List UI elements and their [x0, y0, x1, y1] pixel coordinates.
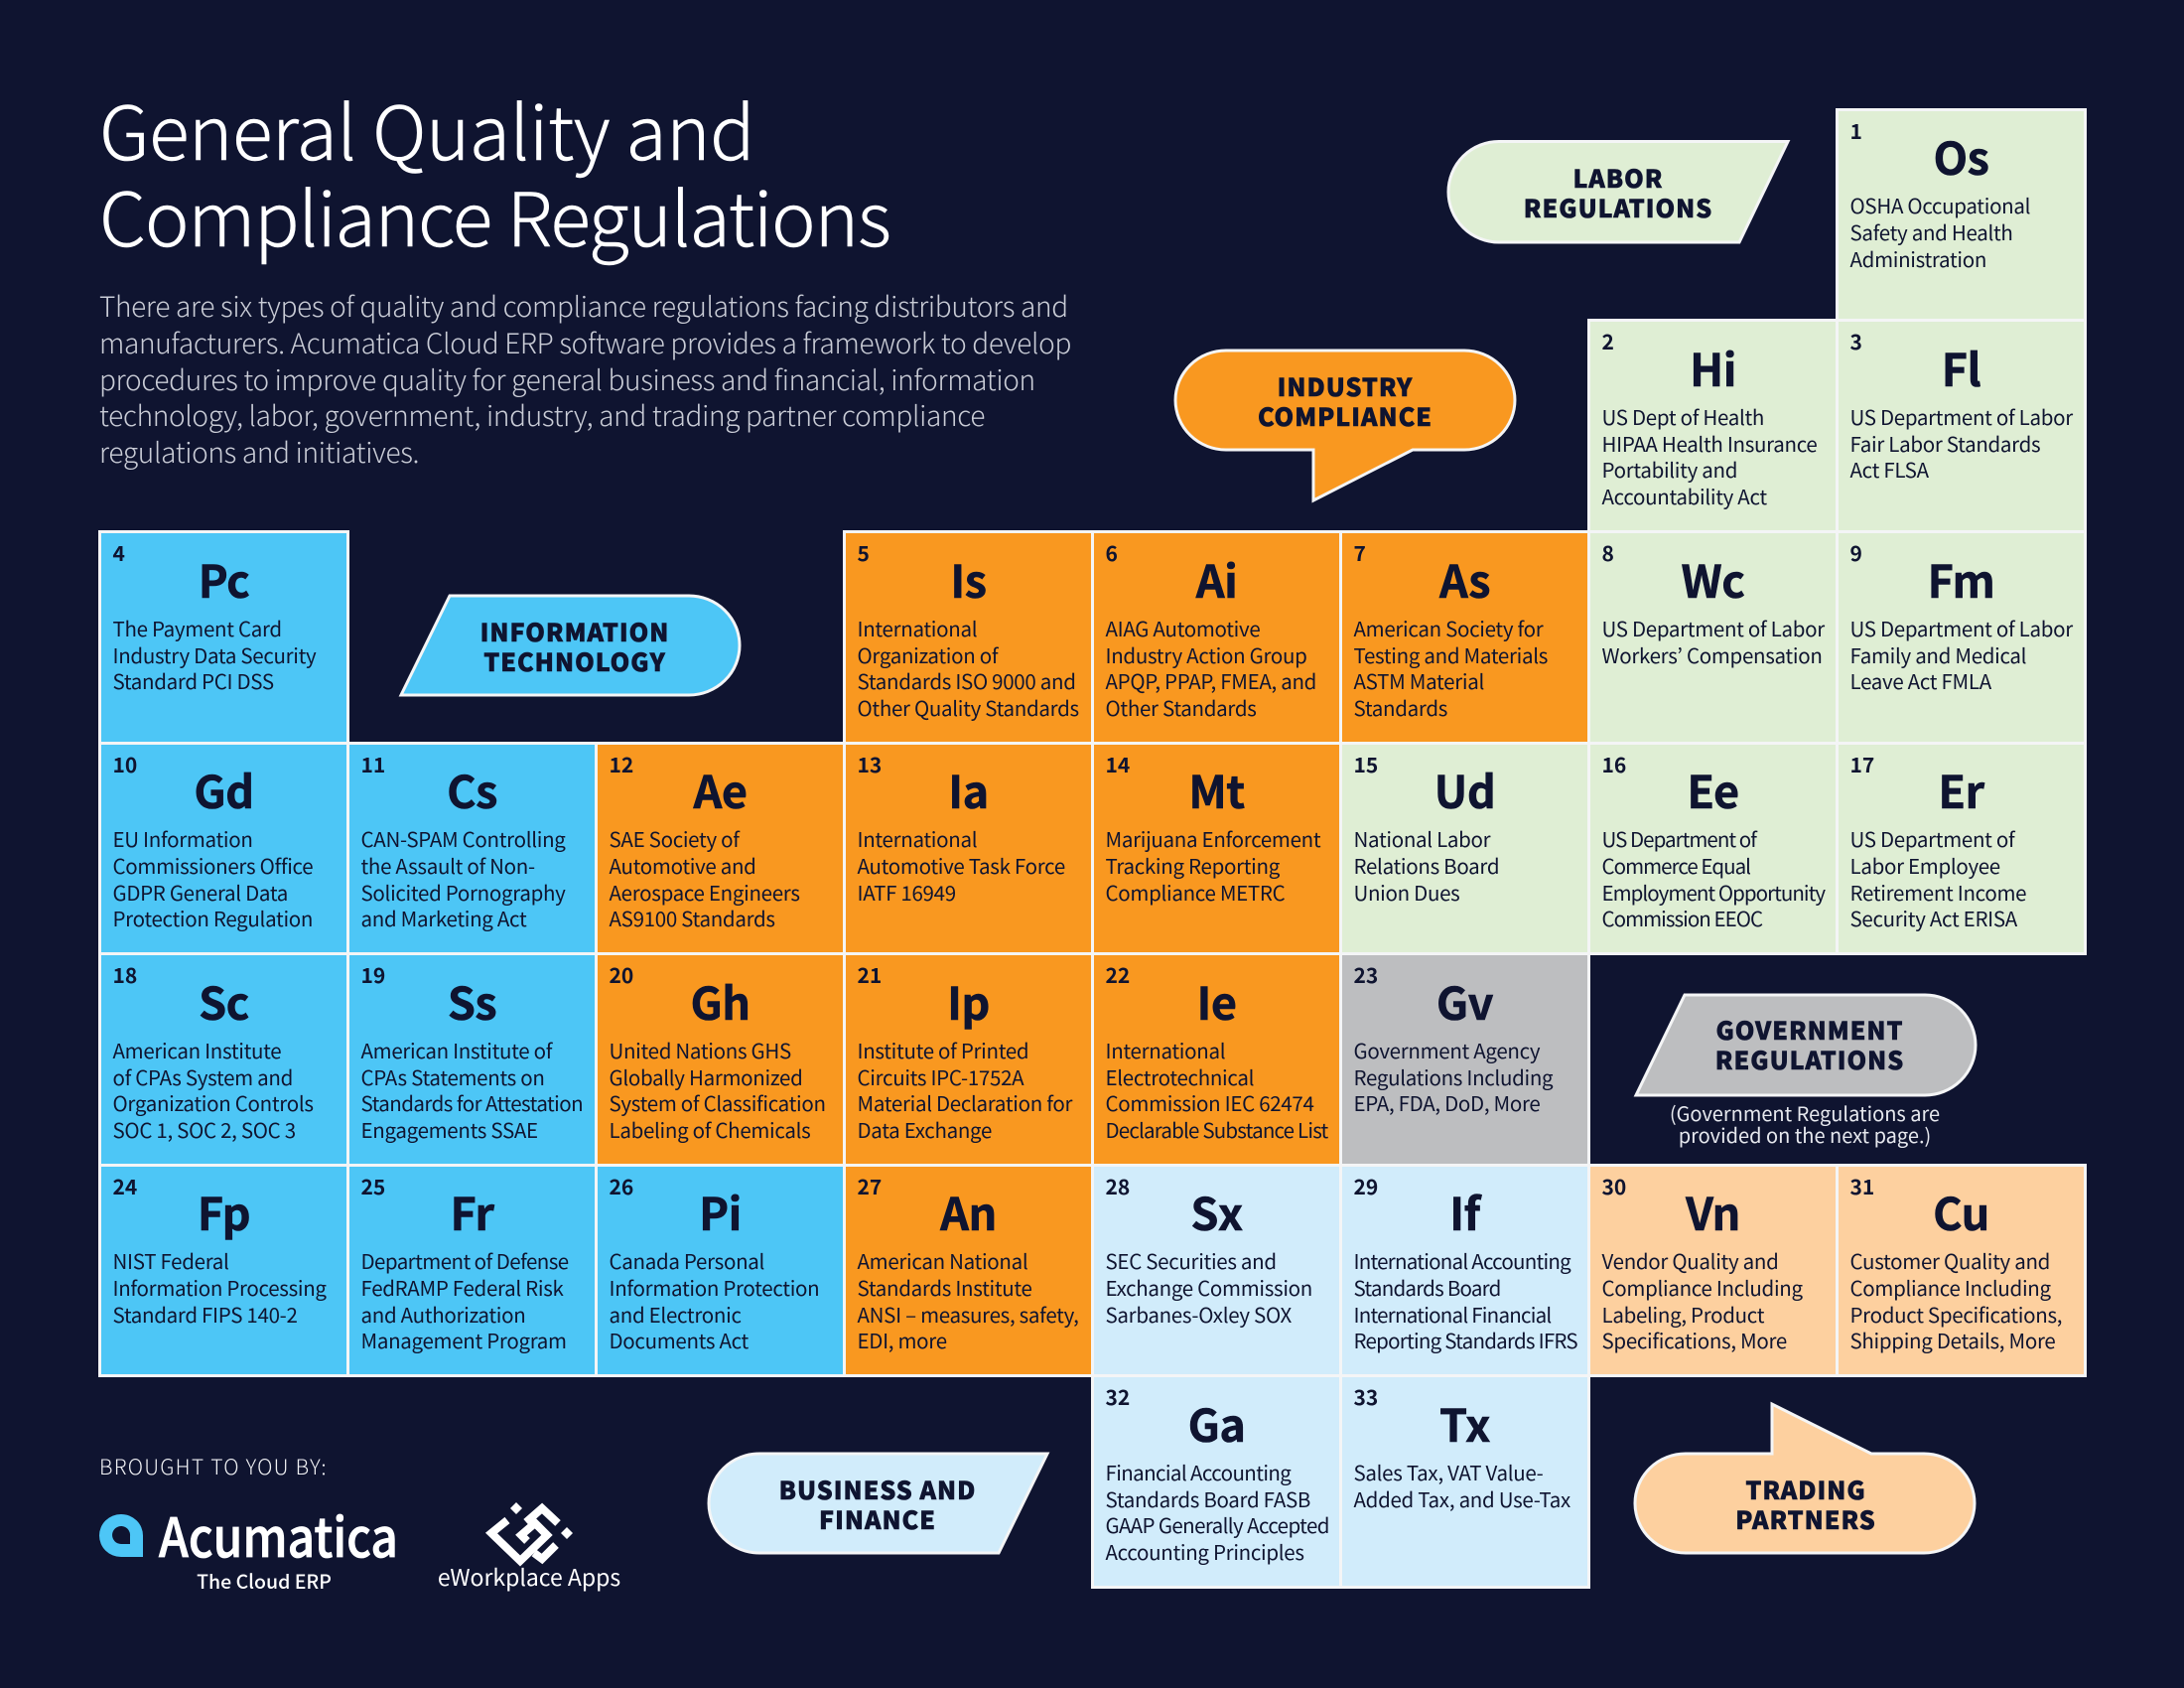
description: Accounting Principles — [1106, 1536, 1304, 1566]
intro text block: regulations and initiatives. — [99, 432, 419, 472]
number: 18 — [113, 960, 137, 990]
description: Standard PCI DSS — [113, 665, 274, 695]
number: 9 — [1850, 538, 1862, 568]
description: and Electronic — [610, 1299, 742, 1329]
number: 26 — [610, 1172, 633, 1201]
cell 24: Fp — [98, 1164, 349, 1377]
number: 11 — [361, 750, 385, 779]
description — [1602, 613, 1825, 669]
number: 8 — [1602, 538, 1614, 568]
description: Sarbanes-Oxley SOX — [1106, 1299, 1292, 1329]
description: US Department of Labor — [1602, 613, 1825, 642]
description — [361, 823, 566, 932]
symbol: Cs — [447, 757, 497, 821]
description: Commerce Equal — [1602, 850, 1750, 880]
icon: eWorkplace mark — [491, 1508, 558, 1561]
description: SEC Securities and — [1106, 1245, 1277, 1275]
description: Fair Labor Standards — [1850, 427, 2040, 457]
description — [1602, 823, 1826, 932]
description: EU Information — [113, 823, 253, 853]
label: industry compliance: COMPLIANCE — [1258, 398, 1433, 434]
cell 30: Vn — [1587, 1164, 1839, 1377]
description: Customer Quality and — [1850, 1245, 2050, 1275]
symbol: Ud — [1434, 757, 1495, 821]
description: OSHA Occupational — [1850, 190, 2030, 219]
number: 30 — [1602, 1172, 1626, 1201]
description: GDPR General Data — [113, 877, 288, 907]
description: Standards — [1354, 692, 1447, 722]
symbol: Gh — [690, 968, 751, 1033]
cell 4: Pc — [98, 530, 349, 745]
number: 16 — [1602, 750, 1626, 779]
description: Portability and — [1602, 454, 1737, 484]
cell 19: Ss — [346, 952, 598, 1167]
description: FedRAMP Federal Risk — [361, 1272, 564, 1302]
description: US Dept of Health — [1602, 401, 1764, 431]
number: 12 — [610, 750, 633, 779]
description: Globally Harmonized — [610, 1060, 803, 1090]
description: Compliance METRC — [1106, 877, 1285, 907]
description — [1354, 1035, 1553, 1117]
symbol: Ip — [947, 968, 990, 1033]
cell 15: Ud — [1339, 741, 1590, 955]
description: of CPAs System and — [113, 1060, 293, 1090]
description: National Labor — [1354, 823, 1490, 853]
label: government regulations: REGULATIONS — [1715, 1042, 1904, 1077]
description: Standards Board FASB — [1106, 1483, 1310, 1513]
description: Labeling of Chemicals — [610, 1114, 810, 1144]
symbol: Ga — [1188, 1390, 1245, 1455]
description: Shipping Details, More — [1850, 1325, 2055, 1354]
cell 18: Sc — [98, 952, 349, 1167]
cell 11: Cs — [346, 741, 598, 955]
symbol: As — [1439, 546, 1490, 611]
description: International — [858, 823, 977, 853]
number: 27 — [858, 1172, 882, 1201]
description: Standards ISO 9000 and — [858, 665, 1076, 695]
description: IATF 16949 — [858, 877, 956, 907]
description — [1602, 401, 1817, 510]
cell 31: Cu — [1836, 1164, 2087, 1377]
description: Leave Act FMLA — [1850, 665, 1991, 695]
logo: eWorkplace Apps — [438, 1502, 620, 1593]
description: International Financial — [1354, 1299, 1551, 1329]
description — [1850, 823, 2026, 932]
number: 33 — [1354, 1382, 1378, 1412]
cell 27: An — [843, 1164, 1094, 1377]
intro text block: procedures to improve quality for general business and financial, information — [99, 359, 1035, 399]
description: Labeling, Product — [1602, 1299, 1764, 1329]
description: Material Declaration for — [858, 1087, 1072, 1117]
description — [1850, 1245, 2062, 1354]
cell 28: Sx — [1091, 1164, 1342, 1377]
description — [1106, 1035, 1328, 1144]
number: 24 — [113, 1172, 137, 1201]
number: 25 — [361, 1172, 385, 1201]
description — [361, 1245, 569, 1354]
symbol: Mt — [1188, 757, 1245, 821]
cell 26: Pi — [595, 1164, 846, 1377]
label: business and finance — [709, 1454, 1047, 1553]
number: 2 — [1602, 327, 1614, 356]
description: Automotive Task Force — [858, 850, 1065, 880]
cell 17: Er — [1836, 741, 2087, 955]
description: Added Tax, and Use-Tax — [1354, 1483, 1570, 1513]
number: 14 — [1106, 750, 1130, 779]
cell 13: Ia — [843, 741, 1094, 955]
description — [1602, 1245, 1803, 1354]
number: 23 — [1354, 960, 1378, 990]
cell 29: If — [1339, 1164, 1590, 1377]
cell 2: Hi — [1587, 319, 1839, 533]
cell 16: Ee — [1587, 741, 1839, 955]
number: 5 — [858, 538, 870, 568]
description: Vendor Quality and — [1602, 1245, 1779, 1275]
description: Specifications, More — [1602, 1325, 1787, 1354]
description: Labor Employee — [1850, 850, 2000, 880]
description — [113, 613, 316, 695]
description — [1850, 613, 2073, 695]
description — [1106, 613, 1316, 722]
icon: Acumatica mark — [99, 1514, 143, 1557]
label: labor regulations: LABOR — [1573, 160, 1663, 196]
cell 9: Fm — [1836, 530, 2087, 745]
cell 3: Fl — [1836, 319, 2087, 533]
description: Industry Action Group — [1106, 639, 1307, 669]
description: Union Dues — [1354, 877, 1459, 907]
description: The Payment Card — [113, 613, 282, 642]
description: US Department of — [1602, 823, 1756, 853]
description: NIST Federal — [113, 1245, 229, 1275]
brought to you by heading: BROUGHT TO YOU BY: — [99, 1452, 328, 1481]
government note — [1670, 1098, 1940, 1149]
description — [1354, 613, 1548, 722]
description: SAE Society of — [610, 823, 740, 853]
description — [1850, 190, 2030, 273]
description: Commission IEC 62474 — [1106, 1087, 1314, 1117]
description: Safety and Health — [1850, 216, 2013, 246]
symbol: Fl — [1942, 335, 1980, 399]
intro text block: There are six types of quality and compliance regulations facing distributors and — [99, 286, 1068, 326]
label: trading partners: TRADING — [1745, 1472, 1866, 1507]
description: Electrotechnical — [1106, 1060, 1254, 1090]
symbol: Cu — [1933, 1179, 1989, 1243]
number: 19 — [361, 960, 385, 990]
description: Management Program — [361, 1325, 567, 1354]
description — [113, 1035, 314, 1144]
description — [1106, 1457, 1329, 1566]
description: EDI, more — [858, 1325, 947, 1354]
label: industry compliance: INDUSTRY — [1278, 368, 1413, 404]
description: Security Act ERISA — [1850, 903, 2017, 932]
description: Standard FIPS 140-2 — [113, 1299, 298, 1329]
description: Information Processing — [113, 1272, 327, 1302]
description: Government Agency — [1354, 1035, 1540, 1064]
description: Commission EEOC — [1602, 903, 1762, 932]
description: Relations Board — [1354, 850, 1499, 880]
label: business and finance: BUSINESS AND — [779, 1472, 976, 1507]
description: GAAP Generally Accepted — [1106, 1509, 1329, 1539]
description: US Department of Labor — [1850, 613, 2073, 642]
description: Financial Accounting — [1106, 1457, 1291, 1486]
label: labor regulations — [1448, 141, 1788, 242]
description: SOC 1, SOC 2, SOC 3 — [113, 1114, 296, 1144]
cell 12: Ae — [595, 741, 846, 955]
description: Exchange Commission — [1106, 1272, 1312, 1302]
description: Regulations Including — [1354, 1060, 1553, 1090]
number: 22 — [1106, 960, 1130, 990]
cell 10: Gd — [98, 741, 349, 955]
number: 31 — [1850, 1172, 1874, 1201]
description: American Institute — [113, 1035, 281, 1064]
government note: (Government Regulations are — [1670, 1098, 1940, 1127]
symbol: Gd — [194, 757, 254, 821]
title: Compliance Regulations — [99, 160, 890, 268]
label: industry compliance — [1175, 351, 1515, 500]
description: Other Quality Standards — [858, 692, 1079, 722]
symbol: Vn — [1686, 1179, 1740, 1243]
symbol: Sx — [1190, 1179, 1243, 1243]
description: Tracking Reporting — [1106, 850, 1280, 880]
title — [99, 73, 890, 268]
symbol: Ae — [693, 757, 747, 821]
description — [361, 1035, 583, 1144]
description: American National — [858, 1245, 1027, 1275]
description: Act FLSA — [1850, 454, 1929, 484]
cell 14: Mt — [1091, 741, 1342, 955]
description: Standards Board — [1354, 1272, 1501, 1302]
logo: Acumatica: The Cloud ERP — [197, 1566, 332, 1595]
description: and Marketing Act — [361, 903, 526, 932]
description: Marijuana Enforcement — [1106, 823, 1320, 853]
description: Testing and Materials — [1354, 639, 1548, 669]
number: 32 — [1106, 1382, 1130, 1412]
cell 5: Is — [843, 530, 1094, 745]
intro text block: technology, labor, government, industry, and trading partner compliance — [99, 395, 985, 435]
description: HIPAA Health Insurance — [1602, 427, 1817, 457]
description — [1354, 1245, 1577, 1354]
label: trading partners: PARTNERS — [1735, 1501, 1876, 1537]
description: Sales Tax, VAT Value- — [1354, 1457, 1543, 1486]
description: Standards for Attestation — [361, 1087, 583, 1117]
number: 28 — [1106, 1172, 1130, 1201]
symbol: Gv — [1436, 968, 1493, 1033]
symbol: Fr — [451, 1179, 493, 1243]
cell 20: Gh — [595, 952, 846, 1167]
symbol: Hi — [1690, 335, 1736, 399]
symbol: Os — [1934, 123, 1988, 188]
description: United Nations GHS — [610, 1035, 791, 1064]
logo: eWorkplace Apps: eWorkplace Apps — [438, 1559, 620, 1593]
description: Standards Institute — [858, 1272, 1032, 1302]
description: Documents Act — [610, 1325, 749, 1354]
description: Aerospace Engineers — [610, 877, 800, 907]
description: ASTM Material — [1354, 665, 1484, 695]
symbol: Fm — [1928, 546, 1994, 611]
cell 22: Ie — [1091, 952, 1342, 1167]
symbol: Ia — [948, 757, 989, 821]
description: Industry Data Security — [113, 639, 316, 669]
description: the Assault of Non- — [361, 850, 535, 880]
cell 25: Fr — [346, 1164, 598, 1377]
cell 8: Wc — [1587, 530, 1839, 745]
description: International Accounting — [1354, 1245, 1570, 1275]
description — [113, 1245, 327, 1329]
symbol: Fp — [198, 1179, 250, 1243]
government note: provided on the next page.) — [1679, 1120, 1931, 1149]
description: Protection Regulation — [113, 903, 313, 932]
description: AS9100 Standards — [610, 903, 775, 932]
description: CPAs Statements on — [361, 1060, 545, 1090]
description — [858, 1035, 1072, 1144]
label: information technology: TECHNOLOGY — [483, 643, 666, 679]
symbol: Ie — [1197, 968, 1237, 1033]
logo: Acumatica: Acumatica — [159, 1494, 398, 1573]
description: and Authorization — [361, 1299, 525, 1329]
label: labor regulations: REGULATIONS — [1524, 190, 1712, 225]
label: trading partners — [1635, 1404, 1975, 1553]
description: Administration — [1850, 243, 1986, 273]
description: Product Specifications, — [1850, 1299, 2062, 1329]
description — [610, 1245, 819, 1354]
symbol: Ss — [448, 968, 496, 1033]
symbol: Ai — [1196, 546, 1237, 611]
cell 7: As — [1339, 530, 1590, 745]
description: Retirement Income — [1850, 877, 2026, 907]
label: government regulations: GOVERNMENT — [1715, 1012, 1904, 1048]
description: American Institute of — [361, 1035, 552, 1064]
cell 21: Ip — [843, 952, 1094, 1167]
title: General Quality and — [99, 73, 754, 182]
symbol: Pc — [199, 546, 249, 611]
symbol: Tx — [1439, 1390, 1490, 1455]
description: Commissioners Office — [113, 850, 313, 880]
number: 1 — [1850, 116, 1862, 146]
number: 17 — [1850, 750, 1874, 779]
description: International — [858, 613, 977, 642]
description: EPA, FDA, DoD, More — [1354, 1087, 1540, 1117]
symbol: Sc — [199, 968, 249, 1033]
description: Solicited Pornography — [361, 877, 566, 907]
description — [858, 823, 1065, 907]
number: 21 — [858, 960, 882, 990]
number: 6 — [1106, 538, 1118, 568]
number: 29 — [1354, 1172, 1378, 1201]
description: Other Standards — [1106, 692, 1257, 722]
description — [1106, 823, 1320, 907]
cell 1: Os — [1836, 107, 2087, 322]
description: ANSI – measures, safety, — [858, 1299, 1079, 1329]
number: 7 — [1354, 538, 1366, 568]
symbol: If — [1449, 1179, 1480, 1243]
intro text block: manufacturers. Acumatica Cloud ERP software provides a framework to develop — [99, 323, 1071, 362]
description — [610, 823, 800, 932]
description — [1106, 1245, 1312, 1329]
symbol: Wc — [1682, 546, 1744, 611]
description: Data Exchange — [858, 1114, 992, 1144]
description: Circuits IPC-1752A — [858, 1060, 1024, 1090]
description — [1354, 823, 1499, 907]
description: International — [1106, 1035, 1225, 1064]
number: 15 — [1354, 750, 1378, 779]
description: Declarable Substance List — [1106, 1114, 1327, 1144]
cell 33: Tx — [1339, 1374, 1590, 1589]
description: Engagements SSAE — [361, 1114, 538, 1144]
symbol: Pi — [699, 1179, 742, 1243]
description: Compliance Including — [1850, 1272, 2051, 1302]
description — [610, 1035, 826, 1144]
number: 13 — [858, 750, 882, 779]
description: APQP, PPAP, FMEA, and — [1106, 665, 1316, 695]
description: Reporting Standards IFRS — [1354, 1325, 1577, 1354]
label: information technology — [401, 596, 740, 695]
logo: Acumatica — [99, 1494, 398, 1595]
description: US Department of Labor — [1850, 401, 2073, 431]
label: government regulations — [1636, 995, 1976, 1095]
symbol: An — [940, 1179, 997, 1243]
description — [113, 823, 313, 932]
description: Employment Opportunity — [1602, 877, 1825, 907]
label: information technology: INFORMATION — [480, 614, 669, 649]
description: Organization of — [858, 639, 998, 669]
description: Organization Controls — [113, 1087, 314, 1117]
description: CAN-SPAM Controlling — [361, 823, 566, 853]
number: 3 — [1850, 327, 1862, 356]
description — [1354, 1457, 1570, 1513]
number: 4 — [113, 538, 125, 568]
label: business and finance: FINANCE — [819, 1501, 936, 1537]
description: Family and Medical — [1850, 639, 2026, 669]
cell 6: Ai — [1091, 530, 1342, 745]
description: Accountability Act — [1602, 481, 1767, 510]
symbol: Is — [950, 546, 987, 611]
symbol: Er — [1938, 757, 1984, 821]
description: Information Protection — [610, 1272, 819, 1302]
cell 32: Ga — [1091, 1374, 1342, 1589]
symbol: Ee — [1687, 757, 1739, 821]
description: Institute of Printed — [858, 1035, 1028, 1064]
description: American Society for — [1354, 613, 1543, 642]
description: US Department of — [1850, 823, 2014, 853]
description: Automotive and — [610, 850, 756, 880]
description: Compliance Including — [1602, 1272, 1803, 1302]
number: 10 — [113, 750, 137, 779]
description — [858, 613, 1079, 722]
description — [1850, 401, 2073, 484]
cell 23: Gv — [1339, 952, 1590, 1167]
description — [858, 1245, 1079, 1354]
description: Workers’ Compensation — [1602, 639, 1823, 669]
description: AIAG Automotive — [1106, 613, 1260, 642]
number: 20 — [610, 960, 633, 990]
description: Canada Personal — [610, 1245, 764, 1275]
description: System of Classification — [610, 1087, 826, 1117]
description: Department of Defense — [361, 1245, 569, 1275]
intro text block — [99, 286, 1071, 472]
